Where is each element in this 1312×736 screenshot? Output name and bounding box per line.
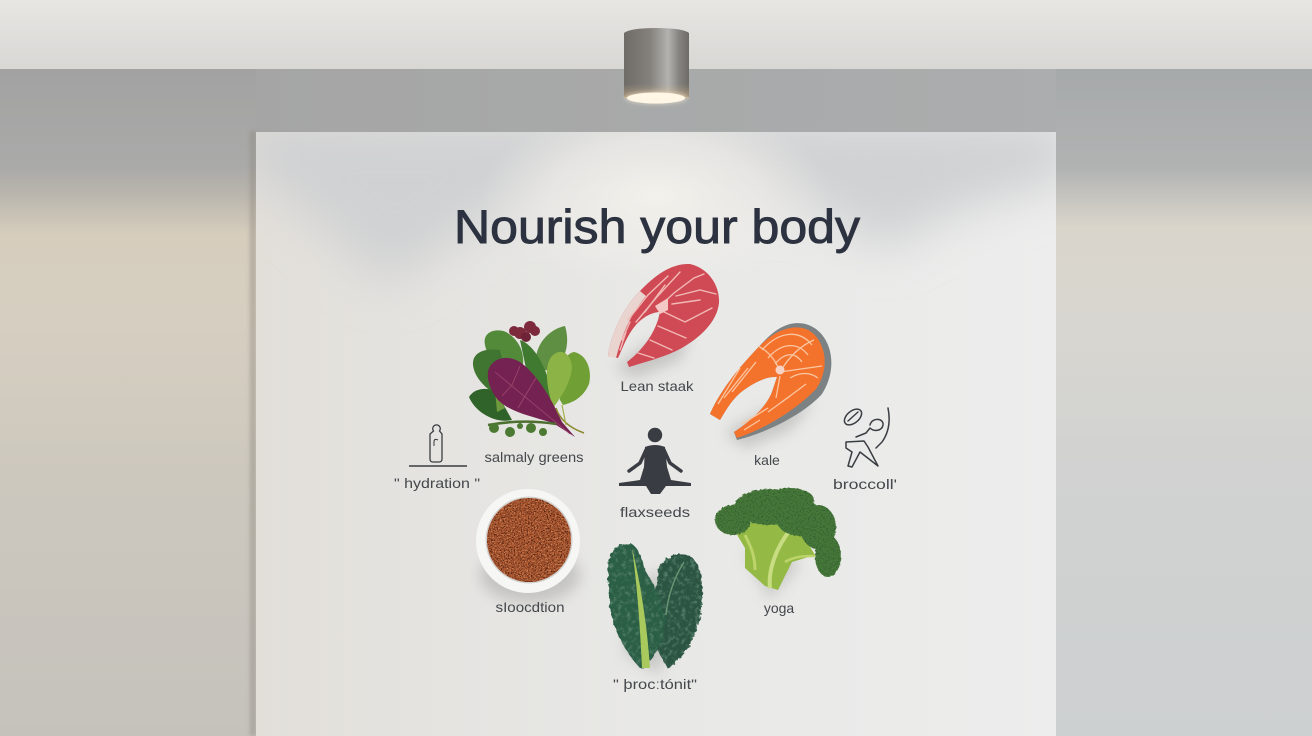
icon: athlete outline <box>841 406 889 467</box>
icon: water bottle <box>409 425 467 466</box>
ceiling light fixture <box>624 28 689 104</box>
panel shadow <box>250 131 256 736</box>
label: lean steak: Lean staak <box>620 378 695 394</box>
label: yoga: yoga <box>764 600 794 616</box>
food: salad greens <box>469 321 590 437</box>
food: broccoli <box>715 488 841 600</box>
label: bowl caption: sIoocdtion <box>496 599 564 615</box>
title: Nourish your body <box>454 200 861 253</box>
ceiling <box>0 0 1312 69</box>
label: kale caption: " þrocːtónit" <box>613 676 697 692</box>
label: hydration: " hydration " <box>394 475 480 491</box>
wall panel <box>240 105 1070 736</box>
food: salmon steak <box>710 323 831 448</box>
label: salad greens: salmaly greens <box>484 449 584 465</box>
food: flaxseed bowl <box>476 489 580 603</box>
icon: yoga figure <box>619 428 691 494</box>
food: kale <box>608 543 702 675</box>
food: lean steak <box>608 264 719 378</box>
label: flaxseeds: flaxseeds <box>620 504 690 520</box>
label: broccoli: broccoll' <box>833 476 897 492</box>
label: kale: kale <box>754 452 780 468</box>
